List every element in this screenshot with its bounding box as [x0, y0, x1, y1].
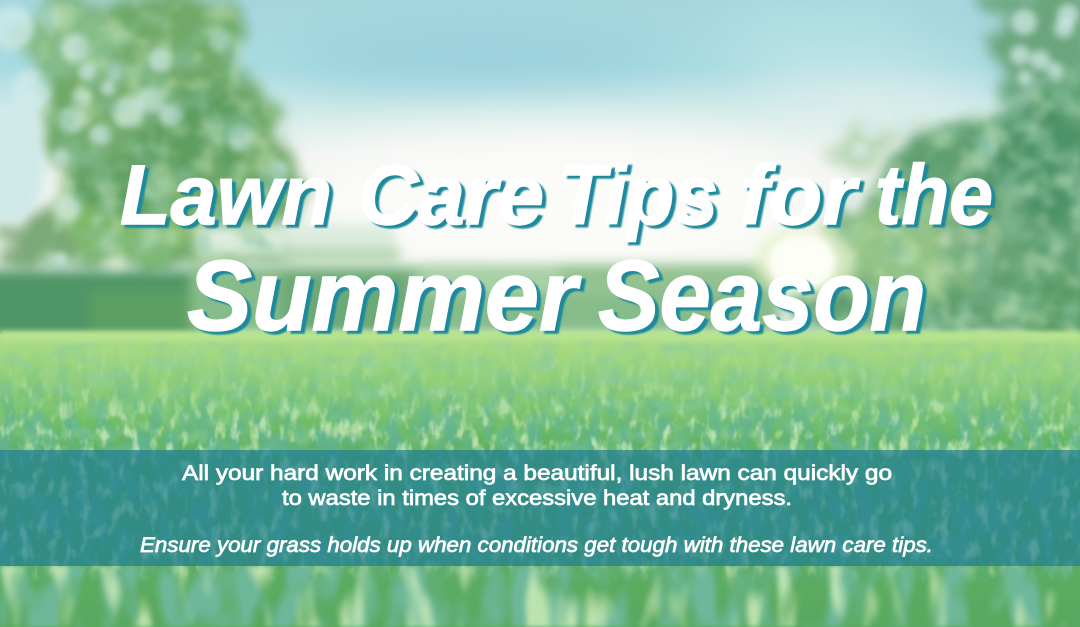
- title shadow: Summer: [191, 243, 586, 355]
- title text: for: [740, 148, 860, 242]
- sun flare: [755, 226, 855, 298]
- left tree sky gap: [0, 107, 46, 223]
- intro text: All your hard work in creating a beautiful, lush lawn can quickly go: [182, 462, 892, 485]
- title: [120, 148, 997, 355]
- left tree bokeh highlights: [0, 6, 288, 271]
- central hedge: [190, 264, 780, 334]
- grass texture: [0, 335, 1080, 627]
- title text: Season: [598, 240, 926, 352]
- horizon haze: [0, 331, 1080, 341]
- title shadow: Lawn: [124, 151, 336, 245]
- teal intro banner: [0, 450, 1080, 566]
- title shadow: Care: [362, 151, 548, 245]
- dark hedge below tree: [0, 270, 210, 338]
- right tree mass: [800, 60, 1080, 340]
- title text: Care: [358, 148, 544, 242]
- clouds and sky streaks: [290, 13, 980, 270]
- intro text: [182, 462, 892, 510]
- title text: Tips: [558, 148, 718, 242]
- title shadow: for: [744, 151, 864, 245]
- intro text: to waste in times of excessive heat and dryness.: [282, 487, 792, 510]
- title shadow: Season: [602, 243, 930, 355]
- sky: [0, 0, 1080, 340]
- title text: the: [875, 148, 993, 242]
- title text: [120, 148, 993, 352]
- foliage mottling: [0, 0, 1080, 340]
- call to action text: Ensure your grass holds up when conditions get tough with these lawn care tips.: [140, 534, 933, 557]
- banner background: [0, 450, 1080, 566]
- right tree bokeh highlights: [852, 4, 1079, 274]
- tree: right: [800, 0, 1080, 340]
- distant treeline: [190, 224, 780, 334]
- pale foliage highlights: [195, 224, 400, 262]
- title text: Lawn: [120, 148, 332, 242]
- right tree upper trunk and canopy: [815, 0, 1080, 165]
- title shadow: the: [879, 151, 997, 245]
- left tree canopy: [0, 0, 296, 270]
- title shadow: [124, 151, 997, 355]
- title shadow: Tips: [562, 151, 722, 245]
- title text: Summer: [187, 240, 582, 352]
- tree: left: [0, 0, 296, 338]
- grass: [0, 334, 1080, 627]
